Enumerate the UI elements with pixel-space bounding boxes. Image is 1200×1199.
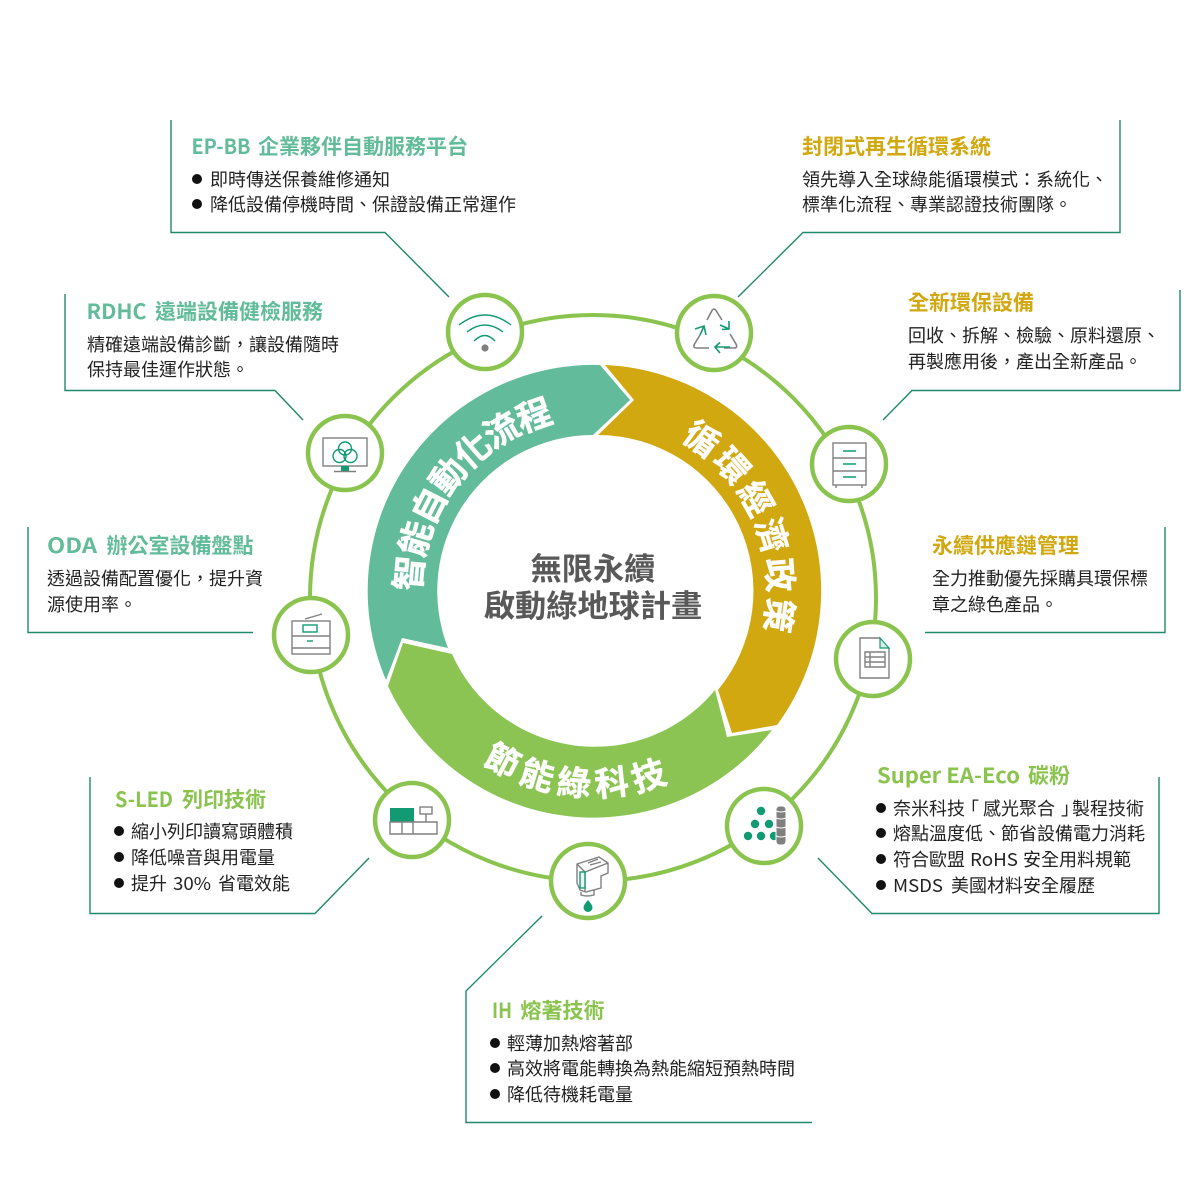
panel: new eco equipment: [883, 287, 1180, 420]
icon: recycle: [677, 296, 751, 370]
panel: IH fusing: IH: [492, 995, 512, 1025]
panel: EP-BB: 降低設備停機時間、保證設備正常運作: [210, 191, 516, 217]
panel: sustainable supply chain: [925, 527, 1165, 632]
center title: 啟動綠地球計畫: [484, 581, 702, 626]
segment: green arrow 節能綠科技: [388, 643, 772, 818]
panel: S-LED: 提升: [131, 870, 167, 896]
panel: ODA: ODA: [47, 530, 98, 560]
panel: closed-loop system: 領先導入全球綠能循環模式：系統化、: [802, 166, 1108, 192]
icon: ink fuser: [551, 844, 625, 918]
panel: new eco equipment: 全新環保設備: [908, 287, 1034, 317]
segment: gold arrow 循環經濟政策: 循環經濟政策: [682, 419, 798, 634]
panel: new eco equipment: 再製應用後，產出全新產品。: [908, 348, 1142, 374]
panel: sustainable supply chain: 永續供應鏈管理: [932, 530, 1079, 560]
segment: gold arrow 循環經濟政策: [598, 365, 822, 733]
panel: EP-BB: 企業夥伴自動服務平台: [258, 131, 468, 161]
panel: Super EA-Eco: [818, 760, 1159, 914]
icon: storage cabinet: [812, 427, 886, 501]
panel: IH fusing: 熔著技術: [520, 995, 604, 1025]
panel: IH fusing: 降低待機耗電量: [507, 1081, 633, 1107]
panel: new eco equipment: 回收、拆解、檢驗、原料還原、: [908, 322, 1160, 348]
outer connecting ring: [310, 315, 876, 881]
panel: RDHC: 遠端設備健檢服務: [155, 296, 323, 326]
panel: S-LED: 降低噪音與用電量: [131, 844, 275, 870]
segment: teal arrow 智能自動化流程: 智能自動化流程: [390, 395, 554, 590]
panel: ODA: 辦公室設備盤點: [106, 530, 254, 560]
icon: wifi: [448, 295, 522, 369]
panel: IH fusing: 高效將電能轉換為熱能縮短預熱時間: [507, 1055, 795, 1081]
panel: ODA: [28, 527, 263, 632]
panel: sustainable supply chain: 章之綠色產品。: [932, 591, 1058, 617]
panel: ODA: 透過設備配置優化，提升資: [47, 565, 263, 591]
icon: multifunction printer: [274, 598, 348, 672]
panel: S-LED: 列印技術: [182, 784, 266, 814]
panel: S-LED: [90, 777, 369, 914]
panel: RDHC: RDHC: [86, 296, 147, 326]
panel: EP-BB: [171, 120, 516, 297]
icon: LED print head: [375, 783, 449, 857]
panel: Super EA-Eco: 奈米科技: [893, 795, 965, 821]
panel: Super EA-Eco: 熔點溫度低、節省設備電力消耗: [893, 820, 1145, 846]
panel: Super EA-Eco: MSDS: [893, 872, 943, 898]
segment: green arrow 節能綠科技: 節能綠科技: [484, 740, 668, 800]
panel: IH fusing: 輕薄加熱熔著部: [507, 1030, 633, 1056]
panel: EP-BB: 即時傳送保養維修通知: [210, 166, 390, 192]
panel: Super EA-Eco: 碳粉: [1028, 760, 1070, 790]
panel: Super EA-Eco: 安全用料規範: [1023, 846, 1131, 872]
panel: S-LED: 30%: [173, 870, 211, 896]
icon: toner particles: [727, 789, 801, 863]
segment: teal arrow 智能自動化流程: [368, 364, 630, 680]
panel: S-LED: 縮小列印讀寫頭體積: [131, 818, 293, 844]
panel: RDHC: [65, 294, 339, 420]
center title: 無限永續: [531, 544, 655, 589]
panel: closed-loop system: 標準化流程、專業認證技術團隊。: [802, 191, 1072, 217]
panel: RDHC: 精確遠端設備診斷，讓設備隨時: [87, 331, 339, 357]
panel: Super EA-Eco: 」: [1061, 795, 1079, 821]
panel: RDHC: 保持最佳運作狀態。: [87, 356, 249, 382]
panel: Super EA-Eco: 符合歐盟: [893, 846, 965, 872]
panel: Super EA-Eco: Super EA-Eco: [877, 760, 1020, 790]
panel: ODA: 源使用率。: [47, 591, 137, 617]
panel: Super EA-Eco: 美國材料安全履歷: [951, 872, 1095, 898]
panel: sustainable supply chain: 全力推動優先採購具環保標: [932, 565, 1148, 591]
panel: S-LED: S-LED: [115, 784, 173, 814]
icon: monitor: [308, 416, 382, 490]
panel: Super EA-Eco: 感光聚合: [983, 795, 1055, 821]
panel: closed-loop system: 封閉式再生循環系統: [802, 131, 991, 161]
panel: IH fusing: [466, 916, 812, 1122]
panel: Super EA-Eco: 製程技術: [1072, 795, 1144, 821]
center title: [484, 544, 702, 626]
panel: EP-BB: EP-BB: [192, 131, 250, 161]
panel: S-LED: 省電效能: [218, 870, 290, 896]
panel: closed-loop system: [738, 120, 1120, 297]
panel: Super EA-Eco: RoHS: [970, 846, 1018, 872]
panel: Super EA-Eco: 「: [961, 795, 979, 821]
icon: document: [836, 622, 910, 696]
